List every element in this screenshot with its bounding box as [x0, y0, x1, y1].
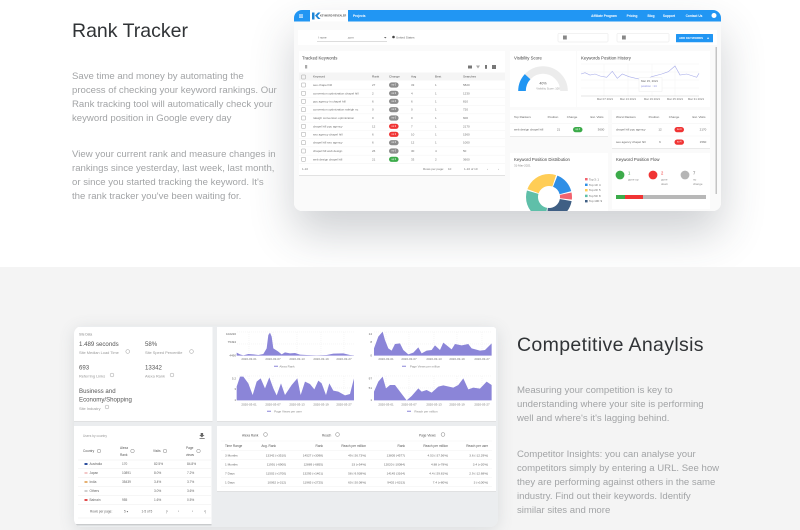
- panel: users by country: ›: [192, 509, 193, 513]
- panel: site data: 1.489 seconds: [79, 341, 119, 348]
- panel: keyword position distribution donut: 31-Mar-2021: [514, 164, 531, 168]
- chart: page views per user: 2020-03-13: [289, 403, 305, 407]
- panel: ranking metrics table: Rank: [316, 444, 323, 448]
- panel: users by country: views: [186, 453, 194, 457]
- panel: tracked keywords table: 1230: [463, 91, 470, 95]
- panel: ranking metrics table: 7 Days: [225, 471, 235, 475]
- panel: ranking metrics table: 4.88 (+78%): [431, 462, 448, 466]
- panel: users by country: India: [90, 480, 97, 484]
- chart: page views per user: [232, 377, 354, 414]
- panel: tracked keywords table: no 0: [391, 150, 397, 152]
- panel: visibility score gauge: Visibility Score: 100: [536, 86, 560, 90]
- panel: tracked keywords table: 1: [435, 108, 437, 112]
- panel: ranking metrics table: 9402 (-6313): [387, 480, 405, 484]
- panel: worst rankers: 2170: [700, 128, 707, 132]
- panel: keywords position history: Mar 25 2021: [667, 97, 684, 101]
- chart: alexa rank: Alexa Rank: [279, 365, 295, 369]
- panel: tracked keywords table: 2: [372, 91, 374, 95]
- panel: tracked keywords table: ppc agency in chapel hill: [313, 99, 346, 103]
- text block: competitor insights: they are performing against others in the same: [517, 477, 715, 488]
- panel: tracked keywords table: 1560: [463, 132, 470, 136]
- panel: tracked keywords table: 4: [435, 149, 437, 153]
- panel: ranking metrics table: Reach: [322, 433, 331, 437]
- panel: tracked keywords table: 50: [463, 149, 467, 153]
- panel: keyword position flow: gone up: [628, 177, 639, 181]
- filter bar: / none: [318, 36, 327, 40]
- chart: reach per million: [369, 377, 492, 414]
- chart: reach per million: 2020-03-19: [449, 403, 465, 407]
- panel: tracked keywords table: chapel hill ppc agency: [313, 124, 343, 128]
- panel: tracked keywords table: no 0: [391, 108, 397, 111]
- panel: keyword position distribution donut: [514, 158, 602, 211]
- panel: tracked keywords table: up 0: [391, 158, 397, 161]
- panel: keyword position flow: 2: [661, 170, 664, 176]
- competitive analysis dashboard screenshot: [74, 326, 498, 527]
- panel: users by country: Japan: [90, 471, 98, 475]
- panel: ranking metrics table: 3 Months: [225, 453, 238, 457]
- panel: tracked keywords table: seo agency chapel hill: [313, 132, 343, 136]
- panel: tracked keywords table: web design chapel hill: [313, 157, 343, 161]
- panel: users by country: Rank: [120, 453, 128, 457]
- chart: reach per million: Reach per million: [414, 410, 438, 414]
- text block: rank tracker details: rankings since yesterday, last week, last month,: [72, 163, 274, 174]
- chart: alexa rank: 2020-03-27: [336, 357, 352, 361]
- panel: keyword position flow: no: [693, 177, 697, 181]
- chart: page views per million: 2020-03-01: [378, 357, 394, 361]
- panel: keyword position distribution donut: Top 50: 8: [589, 194, 601, 198]
- panel: tracked keywords table: 1-10 of 10: [464, 167, 478, 171]
- text block: rank tracker details: the rank tracker you've been waiting for.: [72, 191, 241, 202]
- panel: tracked keywords table: 1: [435, 132, 437, 136]
- panel: keyword position flow: down: [661, 182, 668, 186]
- panel: tracked keywords table: 1: [435, 83, 437, 87]
- text block: rank tracker details: or since you started tracking the keyword. It's: [72, 177, 264, 188]
- panel: ranking metrics table: Reach per million: [341, 444, 366, 448]
- panel: keywords position history: [581, 56, 704, 100]
- chart: alexa rank: 2020-03-01: [241, 357, 257, 361]
- top navigation bar: Projects: [353, 14, 366, 18]
- panel: users by country: Users by country: [83, 434, 107, 438]
- panel: users by country: 3.6%: [187, 489, 194, 493]
- panel: users by country: 170: [122, 462, 128, 466]
- panel: worst rankers: 6: [659, 140, 661, 144]
- panel: top rankers: web design chapel hill: [514, 128, 544, 132]
- panel: users by country: Others: [90, 489, 99, 493]
- chart: page views per million: 2020-03-27: [474, 357, 490, 361]
- panel: tracked keywords table: Searches: [463, 75, 477, 79]
- filter bar: 31-Mar-2021: [627, 36, 645, 40]
- panel: worst rankers: Est. Visits: [692, 115, 706, 119]
- panel: keyword position flow: [616, 158, 706, 199]
- panel: tracked keywords table: 0: [372, 116, 374, 120]
- panel: site data: Site Median Load Time: [79, 350, 119, 355]
- rank tracker dashboard screenshot: [294, 10, 721, 214]
- panel: site data: Business and: [79, 388, 116, 395]
- chart: page views per user: Page Views per user: [274, 410, 302, 414]
- panel: users by country: [74, 426, 212, 525]
- panel: ranking metrics table: 11502 (+1700): [266, 471, 286, 475]
- panel: ranking metrics table: [217, 426, 496, 492]
- panel: tracked keywords table: 12: [372, 124, 376, 128]
- panel: tracked keywords table: ‹: [487, 167, 488, 171]
- panel: keyword position distribution donut: Top 100: 9: [589, 199, 603, 203]
- chart: page views per user: 1: [234, 398, 236, 402]
- panel: keywords position history: Mar 13 2021: [620, 97, 637, 101]
- panel: ranking metrics table: Rank: [398, 444, 405, 448]
- panel: ranking metrics table: 14145 (3164): [387, 471, 405, 475]
- panel: users by country: 3.0%: [154, 489, 161, 493]
- panel: worst rankers: no 4: [677, 140, 682, 144]
- panel: ranking metrics table: 1 Months: [225, 462, 238, 466]
- panel: tracked keywords table: no 0: [391, 116, 397, 120]
- panel: tracked keywords table: 4: [411, 91, 413, 95]
- panel: tracked keywords table: 1: [435, 91, 437, 95]
- panel: tracked keywords table: 1: [435, 124, 437, 128]
- filter bar: 01-Mar-2021: [567, 36, 585, 40]
- panel: worst rankers: Change: [669, 115, 680, 119]
- panel: ranking metrics table: 13295 (+1401): [303, 471, 323, 475]
- panel: ranking metrics table: 7.4 (+80%): [433, 480, 448, 484]
- panel: worst rankers: 12: [658, 128, 662, 132]
- panel: tracked keywords table: raleigh conversion optimization: [313, 116, 355, 120]
- panel: ranking metrics table: 10062 (+312): [268, 480, 286, 484]
- panel: tracked keywords table: 2: [435, 157, 437, 161]
- panel: tracked keywords table: seo chapel hill: [313, 83, 332, 87]
- panel: top rankers: 21: [557, 128, 560, 132]
- chart: alexa rank: 4490: [229, 353, 236, 357]
- panel: keywords position history: Keywords Position History: [581, 56, 632, 60]
- panel: traffic area charts: [217, 327, 496, 422]
- panel: worst rankers: chapel hill ppc agency: [616, 128, 646, 132]
- panel: worst rankers: [612, 116, 710, 149]
- chart: page views per million: 2020-03-19: [449, 357, 465, 361]
- text block: rank tracker intro: keyword position in Google every day: [72, 113, 231, 124]
- text block: competitor insights: Competitor Insights: you can analyse your: [517, 449, 696, 460]
- panel: tracked keywords table: Best: [435, 75, 441, 79]
- panel: tracked keywords table: 10: [411, 132, 415, 136]
- scrollbar: [716, 47, 717, 194]
- panel: tracked keywords table: Avg: [411, 75, 417, 79]
- panel: tracked keywords table: 6: [372, 99, 374, 103]
- panel: worst rankers: no 4: [677, 128, 682, 131]
- text block: rank tracker intro: process of checking your keyword rankings. Our: [72, 85, 277, 96]
- panel: tracked keywords table: chapel hill seo agency: [313, 141, 343, 145]
- chart: alexa rank: 2020-03-07: [265, 357, 281, 361]
- panel: visibility score gauge: [514, 56, 568, 91]
- panel: users by country: 3.4%: [154, 480, 161, 484]
- panel: users by country: 1-5 of 5: [142, 509, 153, 513]
- text block: competitor insights: [517, 449, 719, 516]
- chart: reach per million: 2020-03-13: [426, 403, 442, 407]
- panel: ranking metrics table: 13342 (+3510): [266, 453, 286, 457]
- panel: ranking metrics table: 2.9 (-12.68%): [469, 471, 488, 475]
- heading: competitive analysis: Competitive Anaylsis: [517, 334, 704, 356]
- panel: users by country: 0.5%: [187, 498, 194, 502]
- text block: competitor insights: competitors simply by entering a URL. See how: [517, 463, 719, 474]
- panel: tracked keywords table: 12: [411, 141, 415, 145]
- panel: tracked keywords table: 3600: [463, 157, 470, 161]
- panel: site data: 13342: [145, 364, 163, 372]
- panel: keywords position history: Mar 15, 2021: [641, 79, 658, 83]
- filter bar: ADD KEYWORDS: [679, 36, 703, 40]
- panel: tracked keywords table: 1: [435, 141, 437, 145]
- panel: tracked keywords table: chapel hill web design: [313, 149, 343, 153]
- panel: keyword position flow: gone: [661, 177, 668, 181]
- chart: page views per user: 3: [234, 387, 236, 391]
- panel: tracked keywords table: 810: [463, 99, 468, 103]
- panel: worst rankers: Position: [649, 115, 660, 119]
- panel: ranking metrics table: 4.4 (-29.81%): [429, 471, 448, 475]
- panel: top rankers: 3600: [598, 128, 605, 132]
- panel: tracked keywords table: Tracked Keywords: [302, 56, 337, 60]
- text block: competition intro: [517, 385, 704, 424]
- text block: competitor insights: industry. Find out their keywords. Identify: [517, 491, 691, 502]
- chart: alexa rank: [226, 332, 354, 369]
- chart: reach per million: 2020-03-27: [474, 403, 490, 407]
- panel: top rankers: up 3: [575, 128, 581, 131]
- chart: alexa rank: 2020-03-19: [313, 357, 329, 361]
- panel: ranking metrics table: Time Range: [225, 444, 242, 448]
- panel: tracked keywords table: no 0: [391, 133, 397, 136]
- panel: ranking metrics table: Alexa Rank: [242, 433, 259, 437]
- panel: users by country: |‹: [166, 509, 168, 513]
- chart: page views per user: 5.2: [232, 377, 236, 381]
- panel: users by country: ‹: [178, 509, 179, 513]
- panel: site data: Alexa Rank: [145, 374, 165, 378]
- chart: alexa rank: 102220: [226, 332, 236, 336]
- panel: users by country: ›|: [204, 509, 206, 513]
- panel: users by country: 82.5%: [154, 462, 163, 466]
- panel: top rankers: Est. Visits: [590, 115, 604, 119]
- panel: tracked keywords table: [299, 51, 505, 176]
- panel: tracked keywords table: 7: [411, 124, 413, 128]
- panel: tracked keywords table: 600: [463, 116, 468, 120]
- panel: worst rankers: seo agency chapel hill: [616, 140, 646, 144]
- chart: page views per user: 2020-03-19: [313, 403, 329, 407]
- panel: ranking metrics table: 13805 (4577): [387, 453, 405, 457]
- chart: reach per million: 1: [370, 398, 372, 402]
- panel: visibility score gauge: 40%: [539, 82, 547, 86]
- chart: page views per user: 2020-03-07: [265, 403, 281, 407]
- panel: tracked keywords table: 33: [411, 83, 415, 87]
- panel: users by country: 84.8%: [187, 462, 196, 466]
- panel: users by country: 7.2%: [187, 471, 194, 475]
- top navigation bar: Contact Us: [686, 14, 703, 18]
- panel: users by country: Australia: [90, 462, 102, 466]
- panel: top rankers: Position: [548, 115, 559, 119]
- panel: ranking metrics table: 11991 (-6900): [267, 462, 286, 466]
- panel: ranking metrics table: 12020 (-10084): [384, 462, 405, 466]
- chart: page views per user: 2020-03-27: [336, 403, 352, 407]
- panel: tracked keywords table: Rank: [372, 75, 380, 79]
- panel: top rankers: Change: [567, 115, 578, 119]
- panel: keyword position flow: 7: [693, 170, 696, 176]
- panel: top rankers: [510, 116, 608, 137]
- panel: keywords position history: Mar 07 2021: [597, 97, 614, 101]
- panel: ranking metrics table: Reach per user: [466, 444, 489, 448]
- panel: tracked keywords table: conversion optimization raleigh nc: [313, 108, 359, 112]
- text block: competition intro: well and where's it's lagging behind.: [517, 413, 669, 424]
- panel: users by country: Country: [83, 449, 95, 453]
- panel: users by country: 35439: [122, 480, 131, 484]
- filter bar: .com: [347, 36, 354, 40]
- panel: keyword position distribution donut: Keyword Position Distribution: [514, 157, 570, 162]
- panel: ranking metrics table: 14527 (+3098): [303, 453, 323, 457]
- chart: page views per million: 2020-03-07: [401, 357, 417, 361]
- panel: tracked keywords table: 1000: [463, 141, 470, 145]
- panel: users by country: Visits: [153, 449, 161, 453]
- text block: rank tracker intro: Save time and money by automating the: [72, 71, 244, 82]
- panel: site data: 58%: [145, 341, 158, 348]
- heading: rank tracker: Rank Tracker: [72, 20, 188, 42]
- chart: page views per million: [369, 332, 492, 369]
- chart: page views per million: Page Views per million: [410, 365, 440, 369]
- chart: reach per million: 97: [369, 377, 372, 381]
- top navigation bar: Pricing: [627, 14, 637, 18]
- panel: tracked keywords table: 6: [411, 99, 413, 103]
- panel: worst rankers: Worst Rankers: [616, 115, 636, 119]
- text block: competition intro: understanding where your site is performing: [517, 399, 704, 410]
- chart: page views per million: 2020-03-13: [426, 357, 442, 361]
- filter bar: +: [707, 36, 710, 41]
- panel: ranking metrics table: 49 (-26.73%): [348, 453, 366, 457]
- panel: tracked keywords table: ›: [498, 167, 499, 171]
- panel: ranking metrics table: 11965 (+2725): [303, 480, 323, 484]
- chart: page views per user: 2020-03-01: [241, 403, 257, 407]
- panel: users by country: 5 ▾: [124, 509, 129, 513]
- panel: tracked keywords table: no 0: [391, 100, 397, 103]
- panel: keyword position flow: Keyword Position Flow: [616, 157, 660, 162]
- panel: visibility score gauge: Visibility Score: [514, 56, 542, 60]
- chart: reach per million: 2020-03-01: [378, 403, 394, 407]
- panel: ranking metrics table: 3 (+100%): [474, 480, 488, 484]
- panel: worst rankers: 1560: [700, 140, 707, 144]
- panel: keyword position flow: change: [693, 182, 703, 186]
- panel: ranking metrics table: 3.6 (-12.29%): [469, 453, 488, 457]
- panel: tracked keywords table: 27: [372, 83, 376, 87]
- panel: tracked keywords table: 0: [372, 108, 374, 112]
- chart: page views per million: 8: [370, 340, 372, 344]
- chart: alexa rank: 2020-03-13: [289, 357, 305, 361]
- panel: tracked keywords table: 6: [372, 141, 374, 145]
- panel: users by country: Page: [186, 446, 194, 450]
- top navigation bar: Blog: [647, 14, 655, 18]
- panel: ranking metrics table: 4.53 (-37.56%): [428, 453, 448, 457]
- panel: tracked keywords table: 720: [463, 108, 468, 112]
- chart: reach per million: 2020-03-07: [401, 403, 417, 407]
- panel: tracked keywords table: conversion optimization chapel hill: [313, 91, 359, 95]
- panel: users by country: 10891: [122, 471, 131, 475]
- chart: reach per million: 51: [369, 386, 372, 390]
- panel: tracked keywords table: 21: [372, 157, 376, 161]
- panel: competitive analysis shadow window: [74, 326, 498, 527]
- panel: tracked keywords table: no 0: [391, 125, 397, 128]
- panel: tracked keywords table: no 0: [391, 84, 397, 86]
- panel: tracked keywords table: 26: [372, 149, 376, 153]
- panel: site data: Economy/Shopping: [79, 396, 132, 404]
- panel: keyword position flow: 1: [628, 170, 631, 176]
- panel: keyword position distribution donut: Top 20: 5: [589, 188, 601, 192]
- panel: users by country: Rows per page:: [90, 509, 112, 513]
- panel: ranking metrics table: 1 Days: [225, 480, 235, 484]
- panel: keywords position history: Mar 31 2021: [688, 97, 705, 101]
- panel: keywords position history: Mar 19 2021: [644, 97, 661, 101]
- text block: rank tracker details: [72, 149, 276, 202]
- panel: tracked keywords table: 1: [435, 116, 437, 120]
- panel: site data: [74, 327, 212, 422]
- filter bar: United States: [396, 36, 415, 40]
- text block: rank tracker intro: Rank tracking tool will automatically check your: [72, 99, 272, 110]
- panel: tracked keywords table: 6: [372, 132, 374, 136]
- panel: ranking metrics table: 3.4 (+20%): [473, 462, 488, 466]
- panel: rank tracker shadow window: [294, 10, 721, 211]
- chart: page views per million: 0: [370, 353, 372, 357]
- panel: tracked keywords table: no 0: [391, 141, 397, 144]
- panel: keyword position distribution donut: Top 3: 1: [589, 177, 599, 181]
- panel: tracked keywords table: 1: [435, 99, 437, 103]
- filter bar: [317, 34, 714, 42]
- panel: tracked keywords table: Keyword: [313, 75, 325, 79]
- panel: site data: Referring Links: [79, 374, 105, 378]
- panel: tracked keywords table: 5820: [463, 83, 470, 87]
- panel: tracked keywords table: 2170: [463, 124, 470, 128]
- panel: site data: 693: [79, 364, 90, 372]
- panel: tracked keywords table: 10: [448, 167, 452, 171]
- panel: ranking metrics table: Avg. Rank: [261, 444, 276, 448]
- top navigation bar: [294, 10, 721, 22]
- panel: ranking metrics table: 12889 (-6855): [304, 462, 323, 466]
- panel: users by country: 8.0%: [154, 471, 161, 475]
- panel: site data: Site Speed Percentile: [145, 350, 182, 355]
- panel: tracked keywords table: 1-10: [302, 167, 308, 171]
- panel: tracked keywords table: 0: [411, 116, 413, 120]
- text block: competition intro: Measuring your competition is key to: [517, 385, 673, 396]
- panel: ranking metrics table: 58 (-9.938%): [348, 471, 366, 475]
- panel: users by country: 1.6%: [154, 498, 161, 502]
- panel: ranking metrics table: 60 (-20.08%): [348, 480, 366, 484]
- panel: users by country: Alexa: [120, 446, 128, 450]
- chart: page views per million: 14: [369, 332, 372, 336]
- panel: tracked keywords table: 30: [411, 149, 415, 153]
- panel: site data: Site Industry: [79, 406, 101, 411]
- top navigation bar: KEYWORD REVEALER: [320, 14, 346, 17]
- panel: users by country: 3.7%: [187, 480, 194, 484]
- panel: users by country: Bahrain: [90, 498, 101, 502]
- panel: keyword position distribution donut: Top 10: 4: [589, 183, 601, 187]
- panel: users by country: 955: [122, 498, 128, 502]
- panel: site data: Site Data: [79, 332, 92, 336]
- panel: tracked keywords table: 0: [411, 108, 413, 112]
- panel: ranking metrics table: 33 (+54%): [352, 462, 366, 466]
- chart: alexa rank: 75494: [228, 340, 236, 344]
- panel: tracked keywords table: Change: [389, 75, 400, 79]
- panel: competitive analysis background band: [0, 267, 800, 530]
- text block: competitor insights: similar sites and more: [517, 505, 610, 516]
- text block: rank tracker details: View your current rank and measure changes in: [72, 149, 276, 160]
- panel: ranking metrics table: Reach per million: [423, 444, 448, 448]
- panel: ranking metrics table: Page Views: [419, 433, 436, 437]
- panel: tracked keywords table: no 0: [391, 92, 397, 95]
- panel: tracked keywords table: 33: [411, 157, 415, 161]
- top navigation bar: Support: [663, 14, 676, 18]
- panel: keywords position history: position : 14: [641, 84, 657, 88]
- text block: rank tracker intro: [72, 71, 277, 124]
- panel: tracked keywords table: Rows per page:: [423, 167, 444, 171]
- panel: top rankers: Top Rankers: [514, 115, 531, 119]
- top navigation bar: Affiliate Program: [591, 14, 617, 18]
